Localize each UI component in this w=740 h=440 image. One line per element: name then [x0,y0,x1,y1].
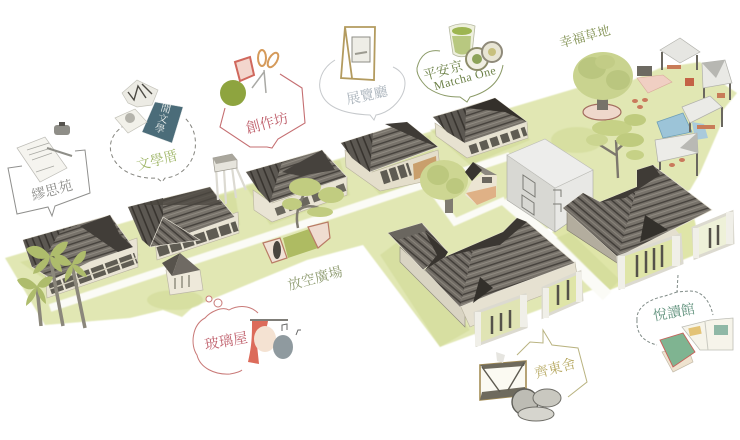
building: 齊東舍 [388,218,582,346]
building: 文學厝 [128,187,239,260]
icon: book [142,102,183,143]
callout: 悅讀館: 悅讀館 [652,300,696,325]
callout: 平安京 Matcha One: Matcha One [432,63,498,93]
label: 幸福草地: 幸福草地 [558,23,612,50]
water tower [213,154,246,204]
roads [50,156,607,308]
small house [465,162,497,205]
icon: white box [115,109,147,133]
tent 4 [655,133,698,176]
icon: ink bottle [54,122,70,135]
callout: 文學厝 [110,80,195,182]
gray building [507,139,593,232]
callout: 悅讀館 [637,275,733,372]
icon: paper and pen [17,137,72,182]
big tree with ring seat [573,52,633,120]
ground shade patches [20,108,620,347]
icon: green paper cut [220,80,246,106]
icon: stamp [235,57,254,81]
tent 2 [702,60,732,100]
ground: lawn and plots [5,62,737,347]
building: 展覽廳 [341,122,441,191]
gable [640,215,668,242]
icon: matcha cup [449,24,475,57]
callout: 創作坊 [220,50,305,148]
tree by small house [420,160,468,213]
callout: 平安京 Matcha One [417,24,503,102]
callout: 平安京 Matcha One: 平安京 [422,58,465,83]
building: 平安京 Matcha One [433,98,528,158]
tent 3 [682,96,722,132]
picnic mat and cart [637,66,672,93]
stools [632,98,648,109]
tent 1 [660,38,700,86]
callout: 齊東舍: 齊東舍 [533,355,578,382]
icon: stones [512,389,561,421]
callout: 齊東舍 [480,330,587,421]
palm trees [17,242,87,328]
callout: 創作坊: 創作坊 [244,110,291,137]
callout: 文學厝: 文學厝 [135,148,180,174]
icon: book: 文 [156,112,169,126]
solar panels [657,113,708,140]
icon: easel frame [341,27,375,80]
icon: curtain and masks [248,320,301,364]
gate walls [618,235,682,288]
gate walls [475,295,526,345]
callout: 展覽廳: 展覽廳 [345,83,390,108]
icon: open book [682,318,733,350]
callout: 繆思苑: 繆思苑 [30,177,75,204]
icon: stacked books [660,333,695,372]
icon: scissors [252,50,280,93]
callout: 玻璃屋 [193,296,301,374]
callout: 繆思苑 [8,122,90,216]
label: 放空廣場: 放空廣場 [286,263,344,294]
small pavilion [162,253,203,295]
second tree [586,114,646,178]
market stalls and tents [637,38,732,176]
icon: frame display [480,352,526,400]
building: 創作坊 [246,150,347,222]
building: 悅讀館 [563,165,733,289]
callout: 展覽廳 [320,27,405,120]
building: 繆思苑 [23,215,138,298]
gable [473,277,493,303]
icon: mochi rolls [466,42,502,70]
tube sculpture [263,222,330,263]
icon: book: 閒 [159,102,172,116]
icon: book: 學 [153,122,166,136]
pine tree [282,178,344,228]
callout: 玻璃屋: 玻璃屋 [203,329,249,354]
icon: ink paper [122,80,158,107]
